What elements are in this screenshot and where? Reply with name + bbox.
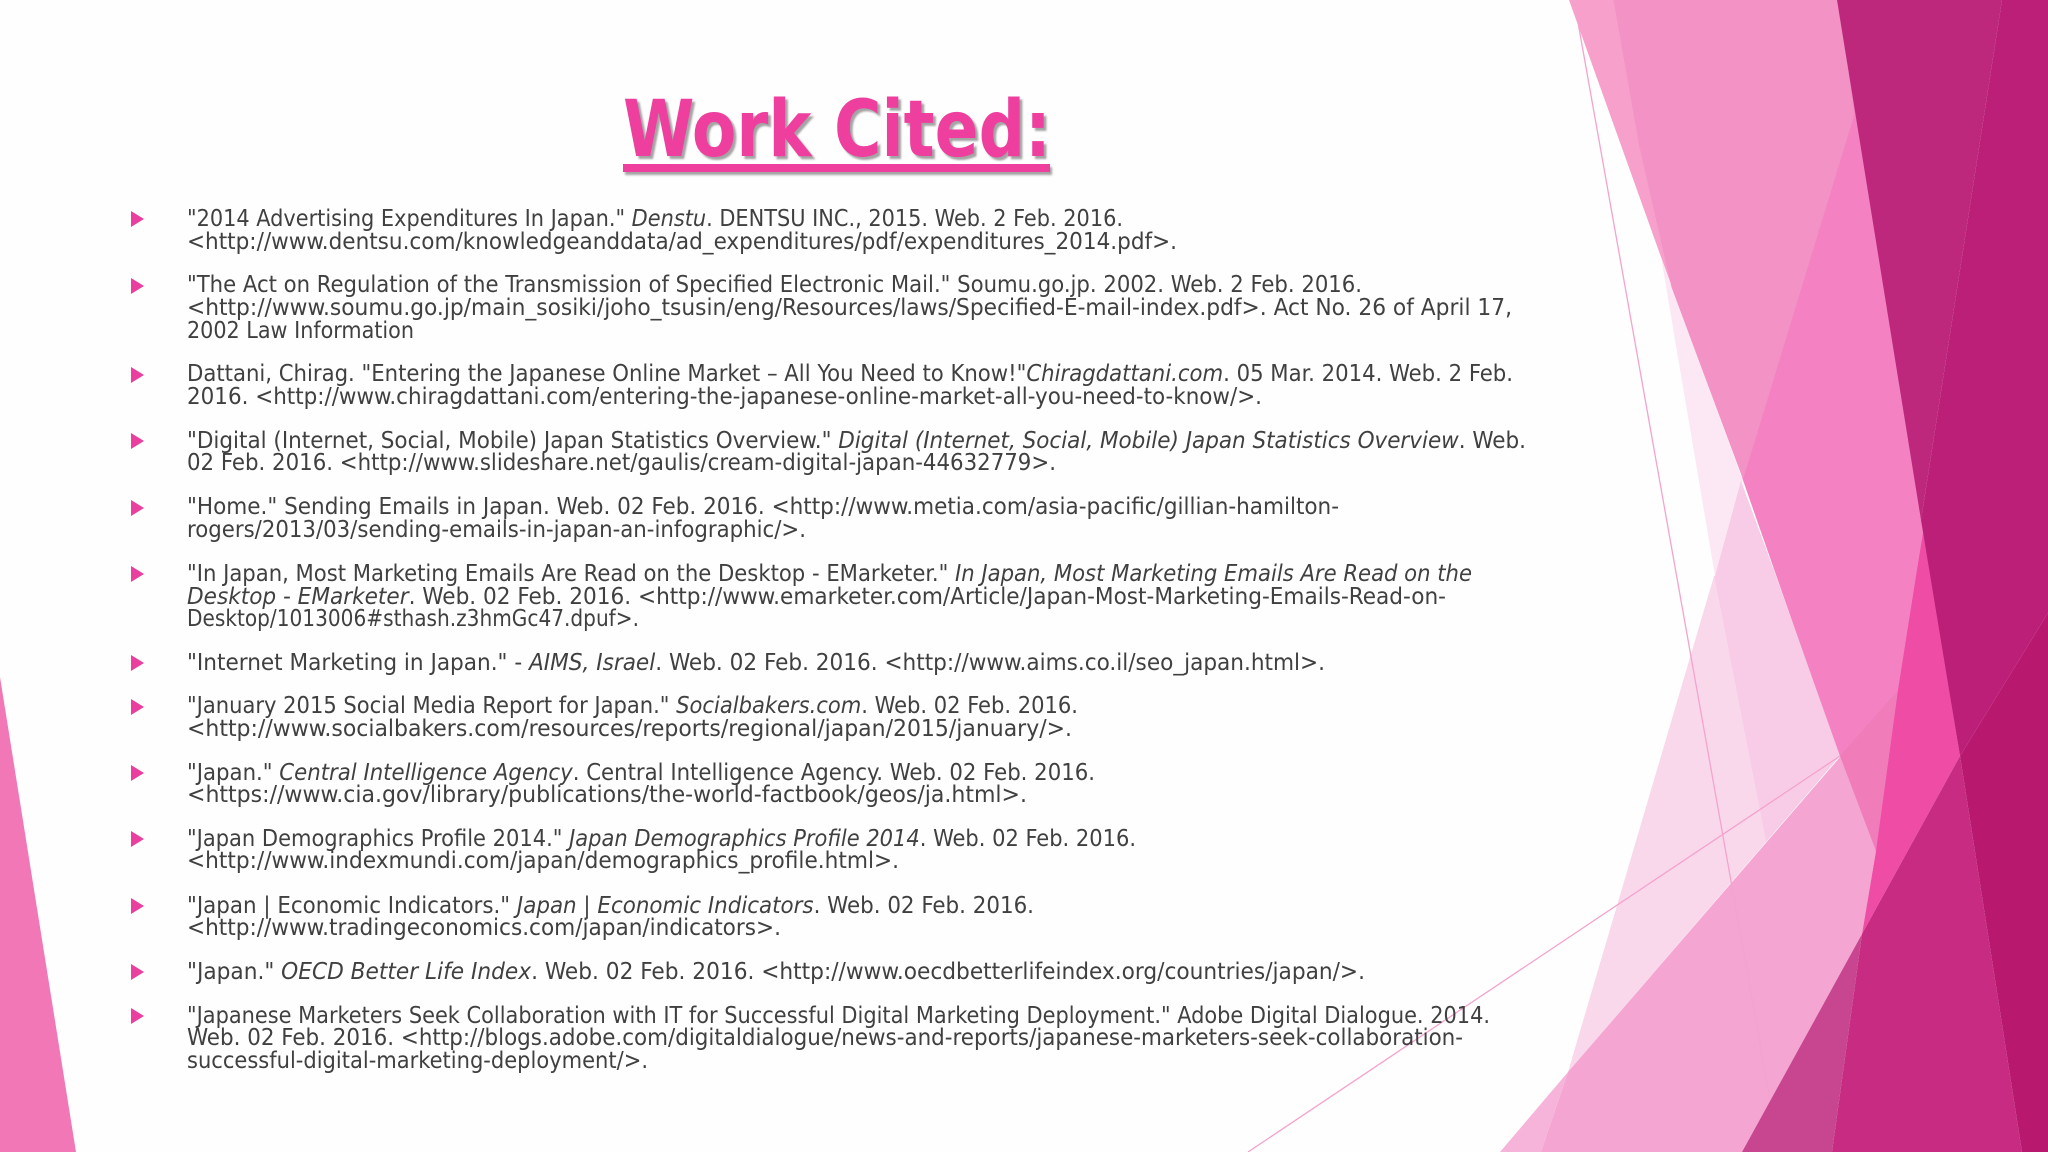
citation 1: <http://www.dentsu.com/knowledgeanddata/ad_expenditures/pdf/expenditures_2014.pdf>. xyxy=(187,229,1177,255)
central pink facet xyxy=(1743,0,1932,851)
citation 8: "January 2015 Social Media Report for Japan." Socialbakers.com. Web. 02 Feb. 2016. xyxy=(187,693,1078,719)
citation 6: "In Japan, Most Marketing Emails Are Read on the Desktop - EMarketer." In Japan, Most Marketing Emails Are Read on the xyxy=(187,561,1472,587)
citation 3: Dattani, Chirag. "Entering the Japanese Online Market – All You Need to Know!" Chiragdattani.com. 05 Mar. 2014. Web. 2 Feb. xyxy=(187,361,1513,387)
citation 10: "Japan Demographics Profile 2014." Japan Demographics Profile 2014. Web. 02 Feb. 2016. xyxy=(187,826,1136,852)
citation 9: "Japan." Central Intelligence Agency . Central Intelligence Agency. Web. 02 Feb. 2016. xyxy=(187,760,1095,786)
lower pale pink facet xyxy=(1714,576,1840,842)
title: Work Cited: xyxy=(623,85,1051,175)
citation 11 xyxy=(131,893,1034,941)
citation 3 xyxy=(131,361,1513,410)
overlap of triangle and central facet xyxy=(1840,690,1898,851)
large lower pink triangle xyxy=(1541,690,1898,1152)
hot pink facet xyxy=(1862,533,1960,934)
citation 8 xyxy=(131,693,1078,742)
upper medium pink facet xyxy=(1614,0,1854,478)
citation 9 xyxy=(131,760,1095,808)
citation 9: <https://www.cia.gov/library/publications/the-world-factbook/geos/ja.html>. xyxy=(187,782,1027,808)
citation 10 xyxy=(131,826,1136,874)
citation 13: "Japanese Marketers Seek Collaboration with IT for Successful Digital Marketing Deployment." Adobe Digital Dialogue. 2014. xyxy=(187,1003,1490,1029)
lower deep magenta facet xyxy=(1960,613,2048,1152)
small pale pink overlap xyxy=(1715,481,1776,576)
citation 8: <http://www.socialbakers.com/resources/reports/regional/japan/2015/january/>. xyxy=(187,716,1072,742)
citation 5: rogers/2013/03/sending-emails-in-japan-an-infographic/>. xyxy=(187,517,806,543)
citation 6: Desktop - EMarketer . Web. 02 Feb. 2016. <http://www.emarketer.com/Article/Japan-Most-Marketing-Emails-Read-on- xyxy=(187,584,1446,610)
citation 5: "Home." Sending Emails in Japan. Web. 02 Feb. 2016. <http://www.metia.com/asia-pacific/gillian-hamilton- xyxy=(187,494,1339,520)
lower medium magenta facet xyxy=(1832,756,2022,1152)
citation 4 xyxy=(131,428,1526,476)
right deep magenta strip xyxy=(1921,0,2048,756)
citation 6: Desktop/1013006#sthash.z3hmGc47.dpuf>. xyxy=(187,606,639,632)
thin diagonal line from top xyxy=(1574,0,1770,1100)
citation 2: <http://www.soumu.go.jp/main_sosiki/joho_tsusin/eng/Resources/laws/Specified-E-mail-index.pdf>. Act No. 26 of April 17, xyxy=(187,295,1512,321)
citation 2: 2002 Law Information xyxy=(187,318,414,344)
citation 3: 2016. <http://www.chiragdattani.com/entering-the-japanese-online-market-all-you-need-to-know/>. xyxy=(187,384,1262,410)
citation 2 xyxy=(131,272,1512,344)
citation 4: "Digital (Internet, Social, Mobile) Japan Statistics Overview." Digital (Internet, Social, Mobile) Japan Statistics Overview . Web. xyxy=(187,428,1526,454)
citation 10: <http://www.indexmundi.com/japan/demographics_profile.html>. xyxy=(187,848,899,874)
citation 7: "Internet Marketing in Japan." - AIMS, Israel. Web. 02 Feb. 2016. <http://www.aims.co.il/seo_japan.html>. xyxy=(187,650,1325,676)
citation 4: 02 Feb. 2016. <http://www.slideshare.net/gaulis/cream-digital-japan-44632779>. xyxy=(187,450,1056,476)
lower pale column xyxy=(1568,576,1766,1072)
upper light facet sliver xyxy=(1569,0,1672,287)
left pink triangle xyxy=(0,677,76,1152)
light sliver at triangle base xyxy=(1500,1072,1568,1152)
citation 1: "2014 Advertising Expenditures In Japan." Denstu. DENTSU INC., 2015. Web. 2 Feb. 2016. xyxy=(187,206,1123,232)
citation 6 xyxy=(131,561,1472,632)
citation 5 xyxy=(131,494,1339,543)
upper pale facet xyxy=(1661,257,1743,576)
citation 11: "Japan | Economic Indicators." Japan | Economic Indicators . Web. 02 Feb. 2016. xyxy=(187,893,1034,919)
upper dark magenta facet xyxy=(1837,0,2002,520)
citation 13: successful-digital-marketing-deployment/>. xyxy=(187,1048,648,1074)
citation 12: "Japan." OECD Better Life Index . Web. 02 Feb. 2016. <http://www.oecdbetterlifeindex.org/countries/japan/>. xyxy=(187,959,1365,985)
citation 13: Web. 02 Feb. 2016. <http://blogs.adobe.com/digitaldialogue/news-and-reports/japanese-marketers-seek-collaboration- xyxy=(187,1025,1463,1051)
lower muted magenta facet xyxy=(1742,934,1862,1152)
citation 13 xyxy=(131,1003,1490,1074)
citation 1 xyxy=(131,206,1177,255)
citation 2: "The Act on Regulation of the Transmission of Specified Electronic Mail." Soumu.go.jp. 2002. Web. 2 Feb. 2016. xyxy=(187,272,1362,298)
citation 11: <http://www.tradingeconomics.com/japan/indicators>. xyxy=(187,915,781,941)
thin diagonal line from bottom xyxy=(1248,756,1840,1152)
